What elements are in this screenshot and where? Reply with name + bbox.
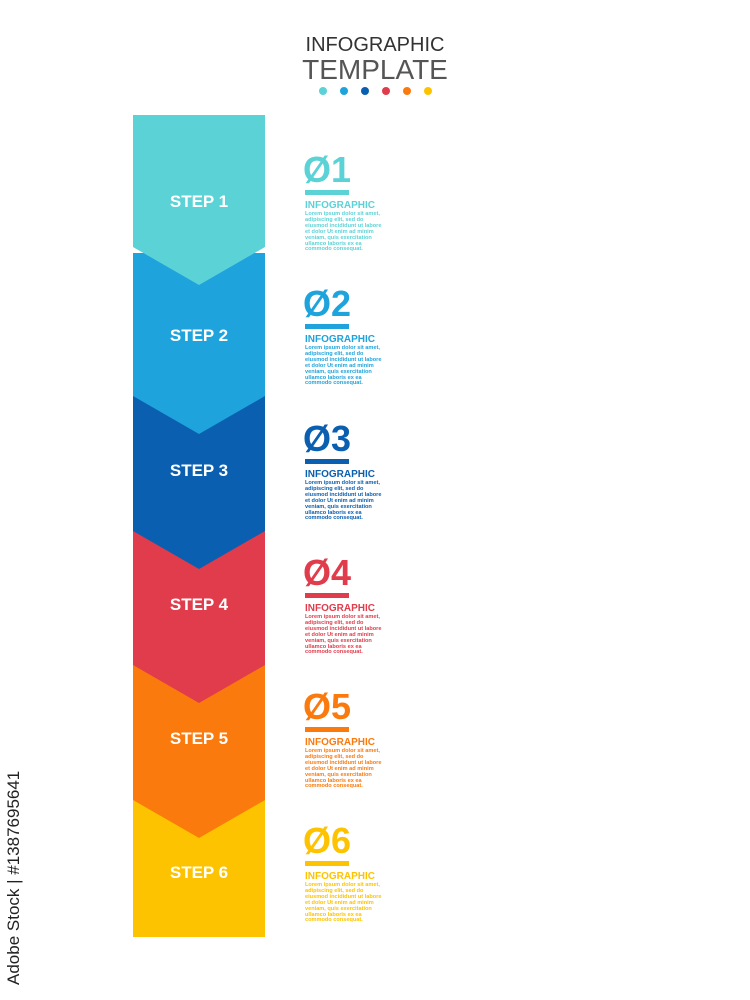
text: Lorem ipsum dolor sit amet, adipiscing elit, sed do eiusmod incididunt ut labore et dolor Ut enim ad minim veniam, quis exercitation ullamco laboris ex ea commodo consequat.: [305, 345, 381, 386]
text: INFOGRAPHIC: [305, 737, 375, 748]
text: INFOGRAPHIC: [305, 871, 375, 882]
title: [302, 34, 448, 85]
text: Lorem ipsum dolor sit amet, adipiscing elit, sed do eiusmod incididunt ut labore et dolor Ut enim ad minim veniam, quis exercitation ullamco laboris ex ea commodo consequat.: [305, 211, 381, 252]
text: Ø3: [303, 418, 351, 459]
text block 4: [303, 552, 382, 655]
text: Lorem ipsum dolor sit amet, adipiscing elit, sed do eiusmod incididunt ut labore et dolor Ut enim ad minim veniam, quis exercitation ullamco laboris ex ea commodo consequat.: [305, 614, 381, 655]
text: Lorem ipsum dolor sit amet, adipiscing elit, sed do eiusmod incididunt ut labore et dolor Ut enim ad minim veniam, quis exercitation ullamco laboris ex ea commodo consequat.: [305, 882, 381, 923]
step 2: [133, 253, 265, 434]
text: INFOGRAPHIC: [305, 200, 375, 211]
text: Lorem ipsum dolor sit amet, adipiscing elit, sed do eiusmod incididunt ut labore et dolor Ut enim ad minim veniam, quis exercitation ullamco laboris ex ea commodo consequat.: [305, 748, 381, 789]
title: TEMPLATE: [302, 54, 448, 85]
step 5: [133, 657, 265, 838]
text block 1: [303, 149, 382, 252]
step 1: [133, 115, 265, 285]
color dots: [319, 87, 432, 95]
text: Ø4: [303, 552, 351, 593]
step 5: STEP 5: [170, 729, 228, 748]
text: INFOGRAPHIC: [305, 469, 375, 480]
text: Lorem ipsum dolor sit amet, adipiscing elit, sed do eiusmod incididunt ut labore et dolor Ut enim ad minim veniam, quis exercitation ullamco laboris ex ea commodo consequat.: [305, 480, 381, 521]
text block 5: [303, 686, 382, 789]
text block 3: [303, 418, 382, 521]
step 2: STEP 2: [170, 326, 228, 345]
step 1: STEP 1: [170, 192, 228, 211]
text: INFOGRAPHIC: [305, 334, 375, 345]
text: Ø6: [303, 820, 351, 861]
text: INFOGRAPHIC: [305, 603, 375, 614]
step 4: [133, 522, 265, 703]
watermark id: Adobe Stock | #1387695641: [4, 771, 23, 985]
text: Ø1: [303, 149, 351, 190]
text block 2: [303, 283, 382, 386]
step 6: STEP 6: [170, 863, 228, 882]
text block 6: [303, 820, 382, 923]
step 4: STEP 4: [170, 595, 229, 614]
title: INFOGRAPHIC: [306, 34, 444, 56]
text: Ø2: [303, 283, 351, 324]
step 3: [133, 388, 265, 569]
step 3: STEP 3: [170, 461, 228, 480]
text: Ø5: [303, 686, 351, 727]
step 6: [133, 791, 265, 937]
